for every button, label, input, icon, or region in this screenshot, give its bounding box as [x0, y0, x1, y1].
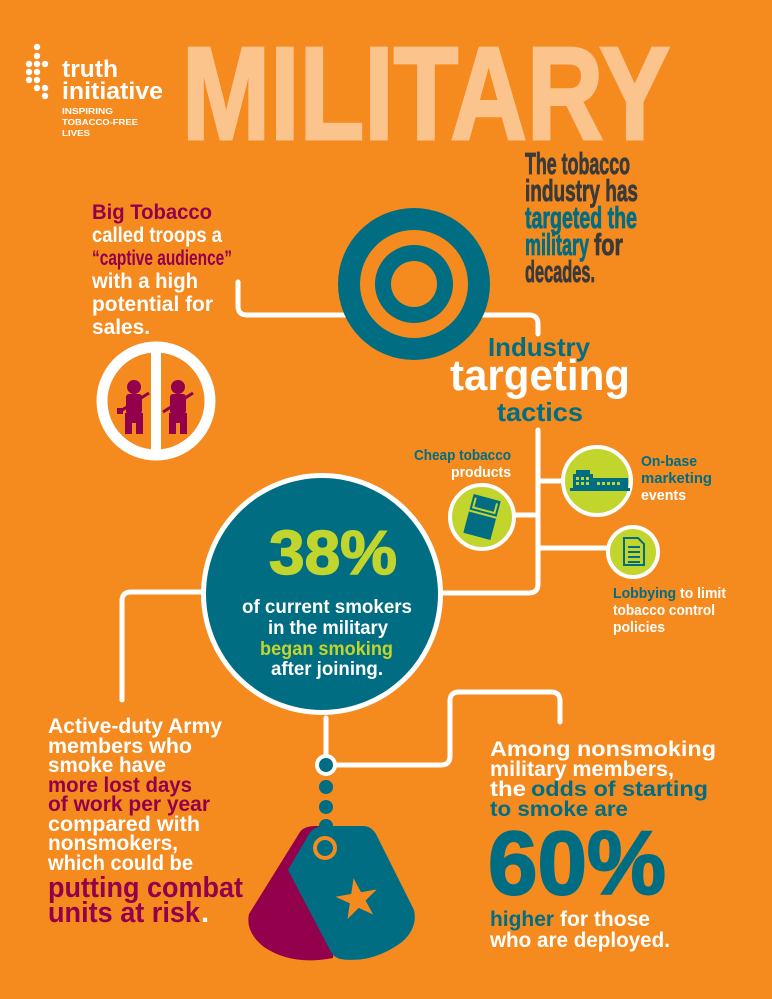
- tactic: on-base marketing events: events: [641, 487, 686, 504]
- text: 60% higher for deployed: higher: [490, 908, 554, 931]
- icon: base building: [570, 470, 630, 491]
- text: active-duty army lost days: putting combat: [48, 872, 243, 904]
- text: 60% higher for deployed: 60%: [488, 814, 666, 914]
- tactic: on-base marketing events: On-base: [641, 453, 697, 470]
- text: active-duty army lost days: compared with: [48, 813, 200, 836]
- text: 60% higher for deployed: to smoke are: [490, 798, 628, 821]
- heading: industry targeted the military: decades.: [525, 254, 595, 289]
- text: Big Tobacco captive audience: Big Tobacco: [92, 201, 212, 224]
- tactic: cheap tobacco products: [414, 447, 514, 549]
- tactic: lobbying: Lobbying to limit: [613, 585, 726, 602]
- text: 60% higher for deployed: military members,: [490, 758, 674, 781]
- heading: industry targeted the military: industry has: [525, 173, 638, 208]
- logo: truth initiative: [26, 44, 163, 138]
- text: active-duty army lost days: units at risk: [48, 897, 201, 929]
- text: Big Tobacco captive audience: “captive audience”: [92, 247, 232, 270]
- stat circle: 38%: 38%: [269, 519, 397, 588]
- icon: cigarette pack: [463, 494, 501, 540]
- heading: Industry targeting tactics: tactics: [497, 397, 583, 427]
- icon: soldiers circle: [102, 345, 210, 457]
- icon: soldier right: [163, 380, 193, 434]
- logo: truth initiative: TOBACCO-FREE: [62, 117, 138, 127]
- icon: dog tags: [248, 826, 415, 960]
- text: 60% higher for deployed: Among nonsmoking: [490, 738, 716, 761]
- tactic: cheap tobacco products: Cheap tobacco: [414, 447, 511, 464]
- text: 60% higher for deployed: for those: [560, 908, 650, 931]
- tactic: cheap tobacco products: products: [451, 464, 511, 481]
- icon: document: [624, 538, 644, 565]
- icon: target: [338, 208, 490, 360]
- text: Big Tobacco captive audience: with a high: [91, 270, 198, 293]
- text: active-duty army lost days: .: [201, 897, 209, 929]
- tactic: on-base marketing events: [563, 447, 712, 515]
- stat circle: 38%: began smoking: [260, 639, 393, 660]
- logo: truth initiative: truth: [62, 56, 118, 83]
- tactic: lobbying: tobacco control: [613, 602, 715, 619]
- text: Big Tobacco captive audience: called troops a: [92, 224, 222, 247]
- text: active-duty army lost days: [47, 715, 243, 929]
- text: active-duty army lost days: members who: [48, 735, 192, 758]
- tactic: on-base marketing events: marketing: [641, 470, 712, 487]
- text: active-duty army lost days: nonsmokers,: [48, 832, 178, 855]
- heading: Industry targeting tactics: targeting: [450, 351, 630, 400]
- heading: industry targeted the military: military: [525, 227, 589, 262]
- tactic: lobbying: policies: [613, 619, 665, 636]
- stat circle: 38%: after joining.: [271, 659, 383, 680]
- text: active-duty army lost days: smoke have: [48, 754, 166, 777]
- text: active-duty army lost days: more lost days: [48, 774, 192, 797]
- text: 60% higher for deployed: who are deployed.: [489, 929, 670, 952]
- stat circle: 38%: [201, 473, 443, 715]
- heading: industry targeted the military: The tobacco: [525, 146, 630, 181]
- connector lines: [122, 282, 610, 765]
- logo: truth initiative: LIVES: [62, 128, 90, 138]
- text: Big Tobacco captive audience: potential for: [92, 293, 213, 316]
- logo: truth initiative: initiative: [62, 78, 163, 105]
- text: active-duty army lost days: Active-duty Army: [48, 715, 222, 738]
- text: active-duty army lost days: of work per year: [48, 793, 210, 816]
- text: Big Tobacco captive audience: [91, 201, 232, 339]
- tactic: lobbying: [608, 527, 726, 636]
- text: 60% higher for deployed: [488, 738, 716, 952]
- heading: industry targeted the military: for: [594, 227, 623, 262]
- stat circle: 38%: of current smokers: [242, 597, 412, 618]
- stat circle: 38%: in the military: [268, 618, 388, 639]
- text: active-duty army lost days: which could be: [47, 852, 193, 875]
- icon: logo dots: [26, 44, 48, 99]
- logo: truth initiative: INSPIRING: [62, 106, 113, 116]
- text: 60% higher for deployed: odds of starting: [531, 778, 708, 801]
- heading: industry targeted the military: [525, 146, 638, 289]
- heading: industry targeted the military: targeted the: [525, 200, 637, 235]
- text: 60% higher for deployed: the: [490, 778, 526, 801]
- text: Big Tobacco captive audience: sales.: [92, 316, 150, 339]
- heading: Industry targeting tactics: Industry: [488, 332, 591, 362]
- icon: chain dots: [317, 756, 335, 833]
- heading: Industry targeting tactics: [450, 332, 630, 427]
- icon: soldier left: [117, 380, 149, 434]
